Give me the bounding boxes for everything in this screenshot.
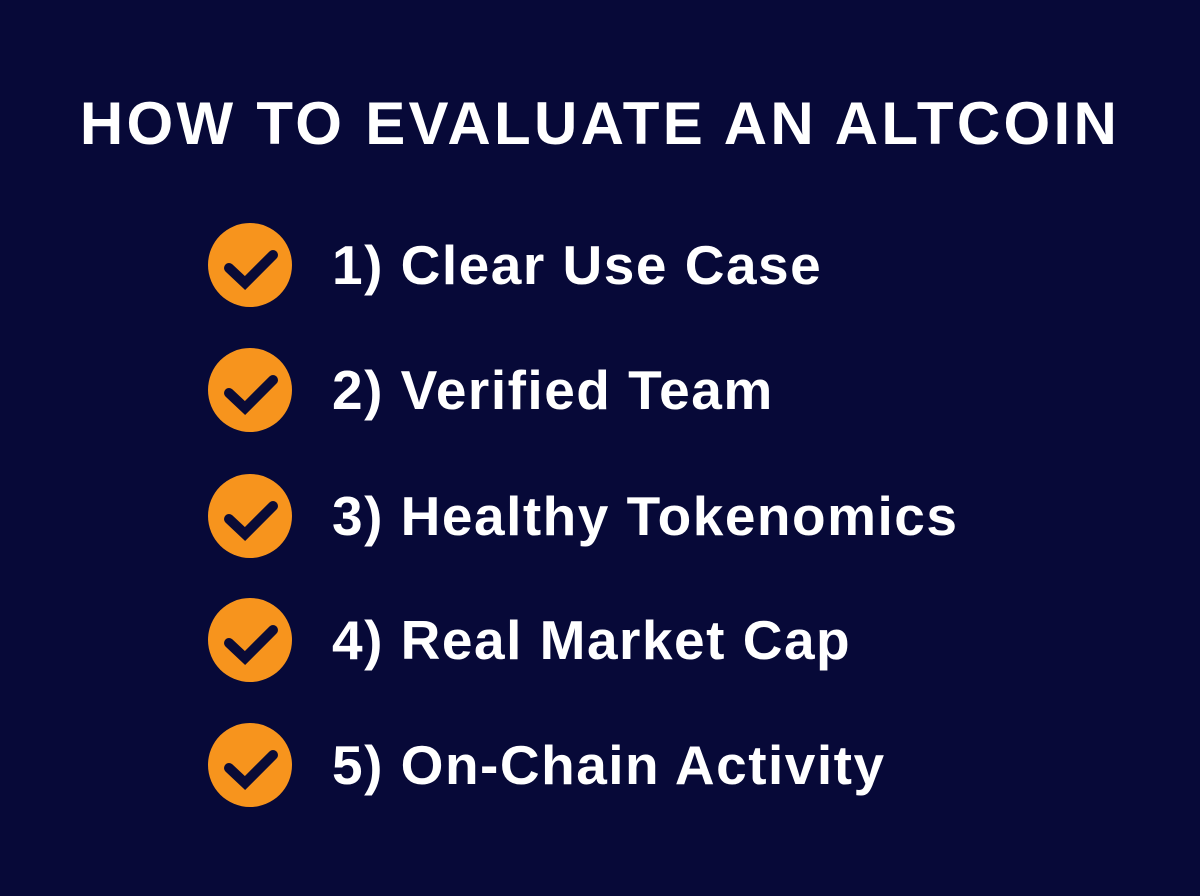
text: item 3: 3) Healthy Tokenomics	[332, 485, 958, 547]
text: item 2: 2) Verified Team	[332, 359, 774, 421]
icon: check	[208, 723, 292, 807]
text: item 4: 4) Real Market Cap	[332, 609, 851, 671]
item 2	[208, 348, 774, 432]
item 4	[208, 598, 851, 682]
icon: check	[208, 223, 292, 307]
item 3	[208, 474, 958, 558]
title: HOW TO EVALUATE AN ALTCOIN	[80, 90, 1120, 157]
text: item 5: 5) On-Chain Activity	[332, 734, 886, 796]
icon: check	[208, 348, 292, 432]
text: item 1: 1) Clear Use Case	[332, 234, 822, 296]
item 1	[208, 223, 822, 307]
item 5	[208, 723, 886, 807]
icon: check	[208, 474, 292, 558]
icon: check	[208, 598, 292, 682]
